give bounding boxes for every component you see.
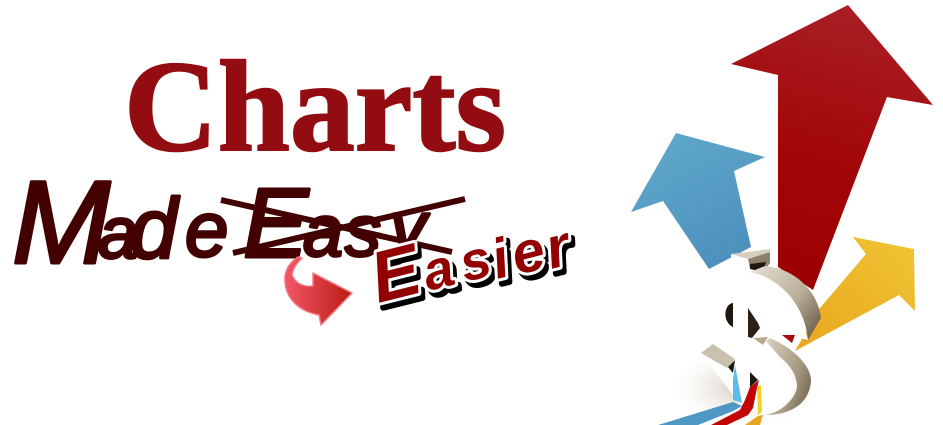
top bar dark interior — [750, 262, 766, 272]
white outline layer: i — [485, 225, 516, 291]
red lettering: s — [453, 228, 497, 294]
handwritten text: Made: M — [12, 157, 111, 289]
yellow growth arrow — [795, 237, 915, 351]
word: Easy: y — [385, 188, 430, 268]
white outline layer: s — [453, 228, 497, 294]
shadow layer: i — [489, 230, 520, 296]
upper curve extrusion — [750, 266, 821, 340]
white outline layer: e — [504, 217, 551, 288]
ground shadow — [665, 346, 825, 425]
white outline layer: a — [416, 237, 460, 303]
handwritten word: Easier — [363, 212, 583, 324]
red lettering: a — [416, 237, 460, 303]
word: Easy: E — [243, 168, 310, 278]
curved red arrow icon — [285, 257, 352, 325]
struck-through word: Easy — [221, 168, 465, 278]
handwritten text: Made: d — [130, 182, 180, 277]
white outline layer: E — [363, 229, 430, 319]
dark hole: upper right — [748, 308, 760, 338]
3D dollar sign with ribbons — [658, 249, 825, 425]
red growth arrow — [731, 5, 933, 290]
ribbon: blue — [658, 402, 742, 425]
top bar cap — [731, 249, 770, 259]
ribbon: red — [711, 380, 759, 425]
ribbon: yellow — [757, 385, 762, 415]
word: Easy: s — [345, 192, 381, 272]
lower-left extrusion — [701, 344, 735, 368]
shadow layer: r — [542, 217, 583, 287]
handwritten text: Made: e — [185, 185, 228, 273]
shadow layer: s — [457, 233, 501, 299]
strike-through cross — [221, 199, 465, 253]
word: Easy: a — [303, 192, 343, 272]
shadow layer: a — [420, 242, 464, 308]
red arrow sliver — [782, 335, 795, 343]
red lettering: E — [363, 229, 430, 319]
red lettering: i — [485, 225, 516, 291]
lower curve extrusion — [765, 338, 811, 415]
blue growth arrow — [631, 133, 765, 269]
top bar opening — [748, 252, 770, 272]
dark hole: lower right — [750, 372, 758, 387]
small beige facet — [753, 337, 768, 345]
white outline layer: r — [538, 212, 579, 282]
dollar front face — [701, 254, 808, 415]
ribbon: orange — [745, 415, 763, 425]
dark hole: upper left — [725, 303, 733, 327]
handwritten text: Made: a — [98, 194, 138, 274]
red lettering: r — [538, 212, 579, 282]
dark hole: lower left — [728, 360, 735, 373]
shadow layer: E — [367, 234, 434, 324]
shadow layer: e — [508, 222, 555, 293]
red lettering: e — [504, 217, 551, 288]
ribbon: light blue — [733, 365, 742, 403]
title: Charts: Charts — [124, 35, 506, 179]
